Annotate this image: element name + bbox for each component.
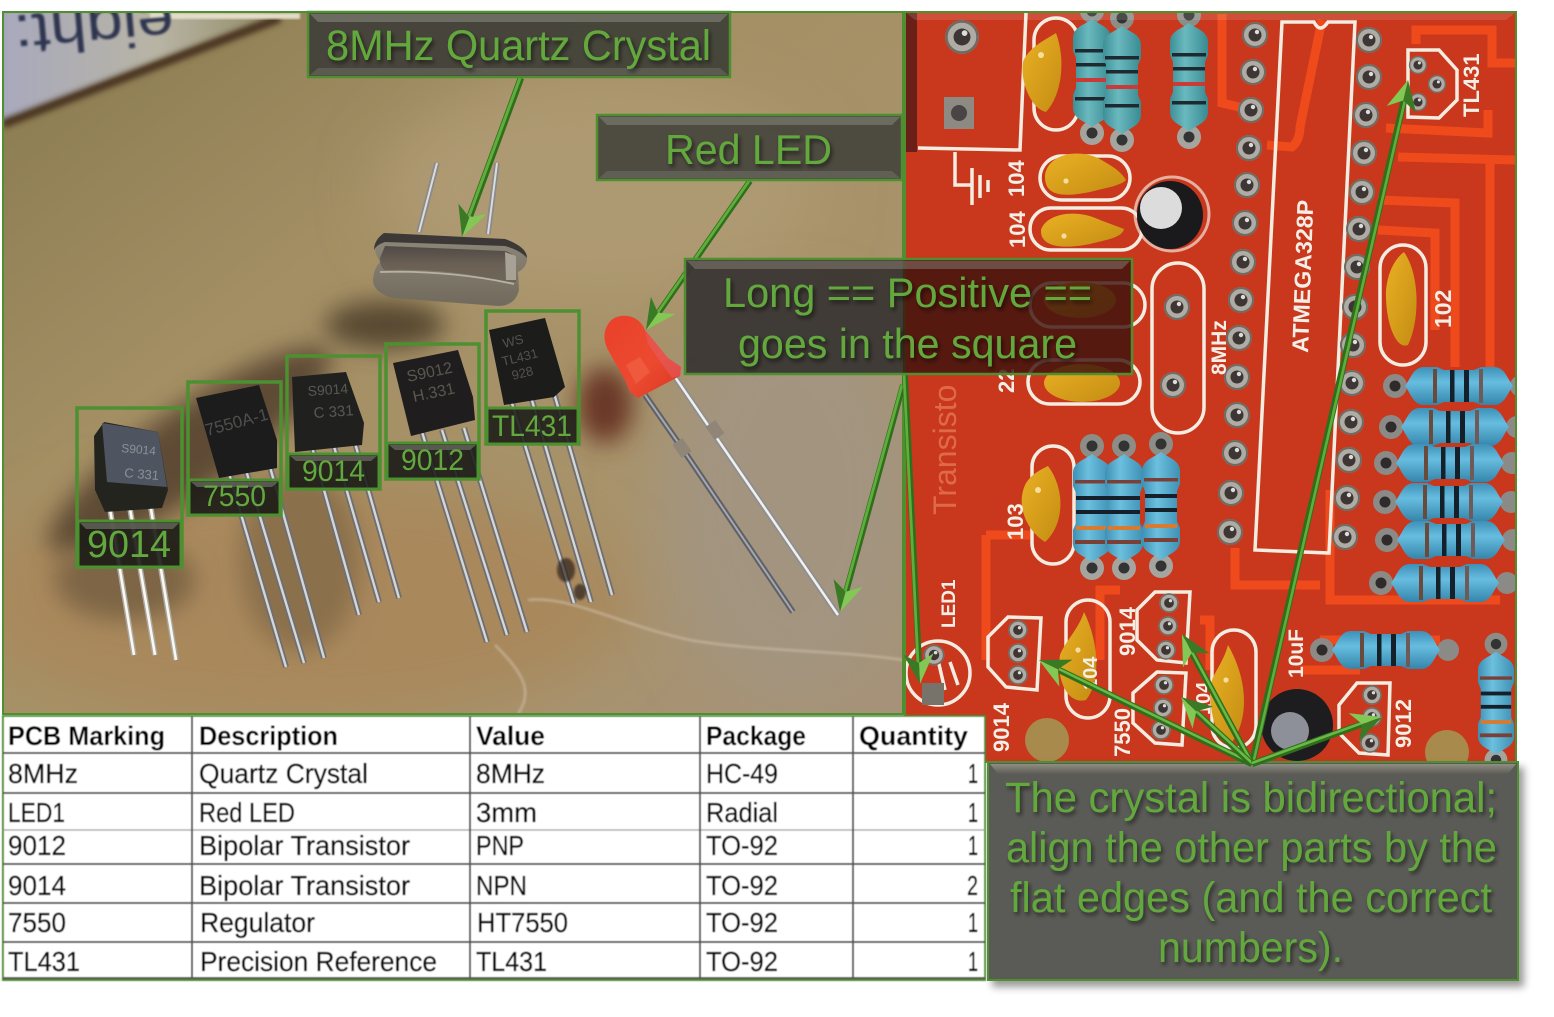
arrow: crystal callout to crystal bbox=[448, 78, 521, 242]
callout: crystal is bidirectional note: flat edges (and the correct bbox=[1010, 874, 1492, 922]
label: 9014 second bbox=[287, 356, 380, 489]
silkscreen labels: Transisto bbox=[927, 385, 963, 515]
table row: 8MHz: 1 bbox=[968, 758, 978, 789]
table row: 7550: TO-92 bbox=[706, 907, 778, 938]
callout: Red LED: Red LED bbox=[665, 126, 832, 173]
table header row: PCB Marking bbox=[8, 721, 165, 751]
table row: 7550: 1 bbox=[968, 907, 978, 938]
arrow: LED callout to LED bbox=[634, 181, 750, 339]
icon: transistor 9014 second: S9014 bbox=[307, 380, 349, 399]
icon: transistor 7550: 7550A-1 bbox=[203, 405, 270, 440]
silkscreen labels: 102 bbox=[1430, 290, 1456, 328]
table row: 7550 bbox=[8, 907, 978, 938]
paper corner with upside-down text bbox=[3, 0, 300, 124]
table header row: Package bbox=[706, 721, 806, 751]
icon: transistor 9014: C 331 bbox=[124, 465, 160, 483]
icon: transistor 9012 bbox=[393, 350, 527, 642]
icon: transistor 9014: S9014 bbox=[121, 441, 157, 458]
label: 7550: 7550 bbox=[203, 480, 266, 513]
table row: 9012: TO-92 bbox=[706, 830, 778, 861]
icon: red LED bbox=[604, 316, 838, 615]
table row: TL431: TL431 bbox=[8, 946, 80, 977]
arrow: note to left 9014 bbox=[1032, 647, 1252, 764]
table row: 9012: PNP bbox=[476, 830, 524, 861]
silkscreen labels: TL431 bbox=[1459, 53, 1484, 117]
label: TL431 bbox=[486, 311, 579, 444]
table row: LED1: LED1 bbox=[8, 797, 65, 828]
silkscreen labels: 9014 bbox=[1115, 606, 1140, 656]
silkscreen outlines bbox=[906, 13, 1457, 755]
table row: 9014: 9014 bbox=[8, 870, 66, 901]
label: 9014: 9014 bbox=[87, 524, 171, 566]
table row: 8MHz: HC-49 bbox=[706, 758, 778, 789]
table row: LED1: 3mm bbox=[476, 797, 537, 828]
callout: 8MHz Quartz Crystal bbox=[308, 12, 730, 77]
silkscreen labels: 104 bbox=[1005, 211, 1030, 248]
label: 9012 bbox=[386, 344, 479, 479]
table header row: Description bbox=[199, 721, 338, 751]
table row: 9012: Bipolar Transistor bbox=[199, 830, 410, 861]
icon: quartz crystal bbox=[373, 163, 527, 306]
icon: transistor 9014 bbox=[94, 422, 176, 660]
table row: 9014 bbox=[8, 870, 978, 901]
callout: long lead is positive: Long == Positive == bbox=[723, 269, 1092, 316]
silkscreen labels: 104 bbox=[1193, 681, 1215, 715]
table row: 8MHz: 8MHz bbox=[476, 758, 545, 789]
table row: LED1: Radial bbox=[706, 797, 778, 828]
table row: 9012: 1 bbox=[968, 830, 978, 861]
label: 9012: 9012 bbox=[401, 444, 464, 477]
label: 9014 bbox=[77, 408, 182, 567]
silkscreen labels: LED1 bbox=[939, 579, 960, 628]
silkscreen labels: 8MHz bbox=[1208, 320, 1231, 375]
table header row bbox=[8, 721, 968, 751]
arrow: note to 9012 bbox=[1252, 703, 1387, 764]
table header row: Quantity bbox=[859, 721, 968, 751]
icon: transistor TL431 bbox=[489, 318, 612, 603]
table row: 9014: NPN bbox=[476, 870, 527, 901]
capacitor highlights bbox=[1035, 52, 1229, 683]
table row: 7550: 7550 bbox=[8, 907, 66, 938]
gold mounting pads bbox=[1025, 718, 1469, 761]
silkscreen labels: 104 bbox=[1004, 160, 1029, 197]
label: 7550 bbox=[188, 382, 281, 515]
table row: 9014: 2 bbox=[967, 870, 978, 901]
table row: 8MHz bbox=[8, 758, 978, 789]
table row: TL431: TO-92 bbox=[706, 946, 778, 977]
arrow: long lead to square pad bbox=[904, 375, 935, 685]
table row: 8MHz: Quartz Crystal bbox=[199, 758, 368, 789]
table row: 9014: TO-92 bbox=[706, 870, 778, 901]
silkscreen labels: 7550 bbox=[1110, 708, 1135, 757]
icon: transistor TL431: TL431 bbox=[500, 345, 540, 369]
table row: 8MHz: 8MHz bbox=[8, 758, 78, 789]
callout: crystal is bidirectional note: align the other parts by the bbox=[1006, 824, 1497, 872]
table row: 7550: HT7550 bbox=[477, 907, 568, 938]
table row: 9014: Bipolar Transistor bbox=[199, 870, 410, 901]
table row: TL431 bbox=[8, 946, 978, 977]
silkscreen labels: 104 bbox=[1080, 656, 1102, 690]
silkscreen labels: 9012 bbox=[1391, 699, 1416, 748]
callout: long lead is positive bbox=[685, 259, 1132, 374]
electrolytic capacitors bbox=[1135, 177, 1333, 761]
arrow: note to upper 9014 bbox=[1169, 627, 1252, 764]
resistors bbox=[1073, 0, 1532, 771]
arrow: note to 7550 bbox=[1171, 686, 1252, 764]
PCB photo panel bbox=[905, 0, 1532, 774]
arrow: long lead pointer bbox=[826, 385, 903, 616]
silkscreen labels: 10uF bbox=[1285, 629, 1308, 678]
icon: transistor 9012: H.331 bbox=[411, 380, 457, 406]
header pin pads bbox=[922, 20, 1446, 753]
icon: transistor 9012: S9012 bbox=[405, 360, 454, 386]
icon: transistor 9014 second: C 331 bbox=[313, 402, 354, 422]
table row: LED1: 1 bbox=[968, 797, 978, 828]
table row: 7550: Regulator bbox=[200, 907, 315, 938]
silkscreen labels bbox=[927, 53, 1484, 757]
table row: 9012 bbox=[8, 830, 978, 861]
table header row: Value bbox=[476, 721, 545, 751]
table row: LED1: Red LED bbox=[199, 797, 295, 828]
callout: crystal is bidirectional note: numbers). bbox=[1158, 924, 1343, 972]
table row: TL431: 1 bbox=[968, 946, 978, 977]
parts table bbox=[3, 716, 985, 980]
table row: 9012: 9012 bbox=[8, 830, 66, 861]
copper traces bbox=[986, 14, 1516, 670]
silkscreen labels: ATMEGA328P bbox=[1287, 199, 1318, 353]
silkscreen labels: 22 bbox=[994, 369, 1019, 393]
callout: Red LED bbox=[597, 115, 902, 180]
icon: transistor 7550 bbox=[196, 385, 324, 667]
table row: LED1 bbox=[8, 797, 978, 828]
label: TL431: TL431 bbox=[492, 410, 572, 443]
callout: crystal is bidirectional note bbox=[988, 762, 1518, 980]
arrow: note to TL431 bbox=[1252, 77, 1423, 764]
label: 9014 second: 9014 bbox=[302, 455, 365, 488]
callout: crystal is bidirectional note: The crystal is bidirectional; bbox=[1005, 774, 1497, 822]
icon: transistor 9014 second bbox=[292, 372, 399, 615]
table row: TL431: Precision Reference bbox=[200, 946, 437, 977]
table row: TL431: TL431 bbox=[476, 946, 547, 977]
callout: long lead is positive: goes in the square bbox=[738, 320, 1077, 367]
yellow ceramic capacitors bbox=[1022, 33, 1417, 745]
silkscreen labels: 9014 bbox=[989, 702, 1014, 752]
icon: transistor TL431: WS bbox=[501, 331, 525, 351]
photo panel: transistors, crystal and LED on cardboard bbox=[0, 0, 920, 720]
silkscreen labels: 103 bbox=[1003, 503, 1028, 540]
icon: transistor TL431: 928 bbox=[510, 363, 535, 383]
callout: 8MHz Quartz Crystal: 8MHz Quartz Crystal bbox=[326, 22, 711, 70]
